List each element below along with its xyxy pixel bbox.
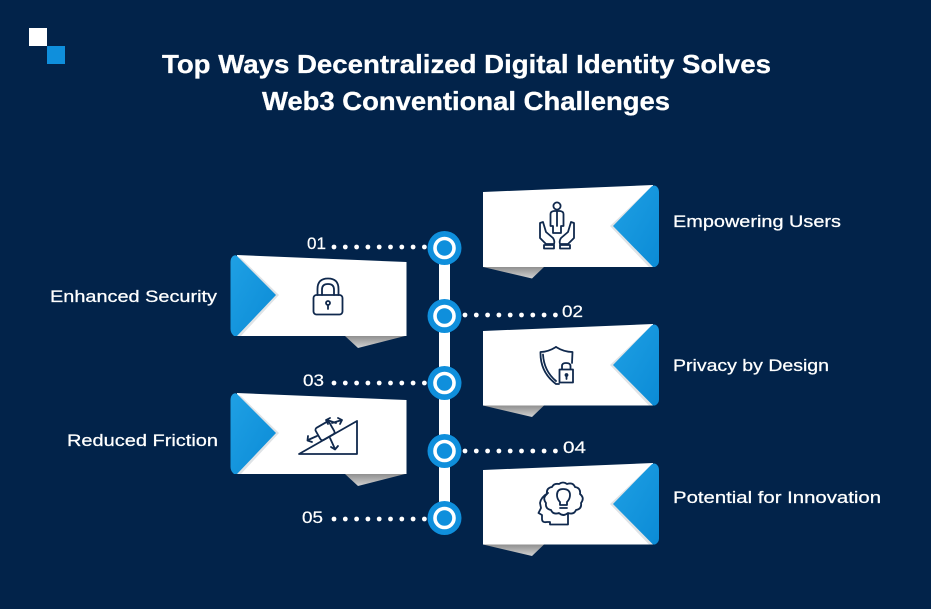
icon: head with lightbulb xyxy=(538,482,583,524)
card body xyxy=(483,324,653,406)
card body xyxy=(483,185,653,267)
blue arrow tab xyxy=(230,393,276,474)
tab shadow xyxy=(610,326,654,406)
number 01: 01 xyxy=(307,234,326,253)
number 02: 02 xyxy=(562,302,583,321)
number 05: 05 xyxy=(302,508,323,527)
node 02 xyxy=(428,299,462,333)
label: empowering users: Empowering Users xyxy=(673,213,841,231)
icon: shield with lock xyxy=(540,347,573,384)
dotted connector 02 xyxy=(463,313,558,317)
card body xyxy=(237,393,406,474)
node 05 xyxy=(428,501,462,535)
card fold xyxy=(483,544,544,556)
number 04: 04 xyxy=(563,438,586,457)
blue arrow tab xyxy=(230,255,276,336)
tab shadow xyxy=(610,465,654,544)
panel: enhanced security xyxy=(230,255,406,348)
node 03 xyxy=(428,366,462,400)
label: enhanced security: Enhanced Security xyxy=(50,288,218,306)
panel: potential for innovation xyxy=(483,463,659,556)
card fold xyxy=(345,474,405,486)
tab shadow xyxy=(236,257,279,336)
blue arrow tab xyxy=(613,463,659,544)
dotted connector 01 xyxy=(332,245,427,249)
label: privacy by design: Privacy by Design xyxy=(673,357,829,375)
label: potential for innovation: Potential for Innovation xyxy=(673,489,881,507)
tab shadow xyxy=(236,395,279,474)
label: reduced friction: Reduced Friction xyxy=(67,432,218,450)
tab shadow xyxy=(610,187,654,267)
icon: block on inclined plane xyxy=(299,418,357,454)
title xyxy=(162,49,771,116)
icon: padlock xyxy=(314,278,342,314)
blue arrow tab xyxy=(613,324,659,406)
card body xyxy=(483,463,653,544)
blue arrow tab xyxy=(613,185,659,267)
node 04 xyxy=(428,434,462,468)
panel: empowering users xyxy=(483,185,659,278)
logo xyxy=(29,28,65,64)
card fold xyxy=(483,406,544,417)
card fold xyxy=(483,267,544,278)
panel: privacy by design xyxy=(483,324,659,417)
card fold xyxy=(345,336,405,348)
panel: reduced friction xyxy=(230,393,406,486)
dotted connector 03 xyxy=(332,381,427,385)
node 01 xyxy=(428,231,462,265)
dotted connector 04 xyxy=(463,449,558,453)
card body xyxy=(237,255,406,336)
title: Top Ways Decentralized Digital Identity Solves xyxy=(162,49,771,79)
dotted connector 05 xyxy=(332,517,427,521)
timeline spine xyxy=(439,248,450,518)
number 03: 03 xyxy=(303,371,324,390)
icon: person held in hands xyxy=(540,202,574,248)
title: Web3 Conventional Challenges xyxy=(262,86,670,116)
